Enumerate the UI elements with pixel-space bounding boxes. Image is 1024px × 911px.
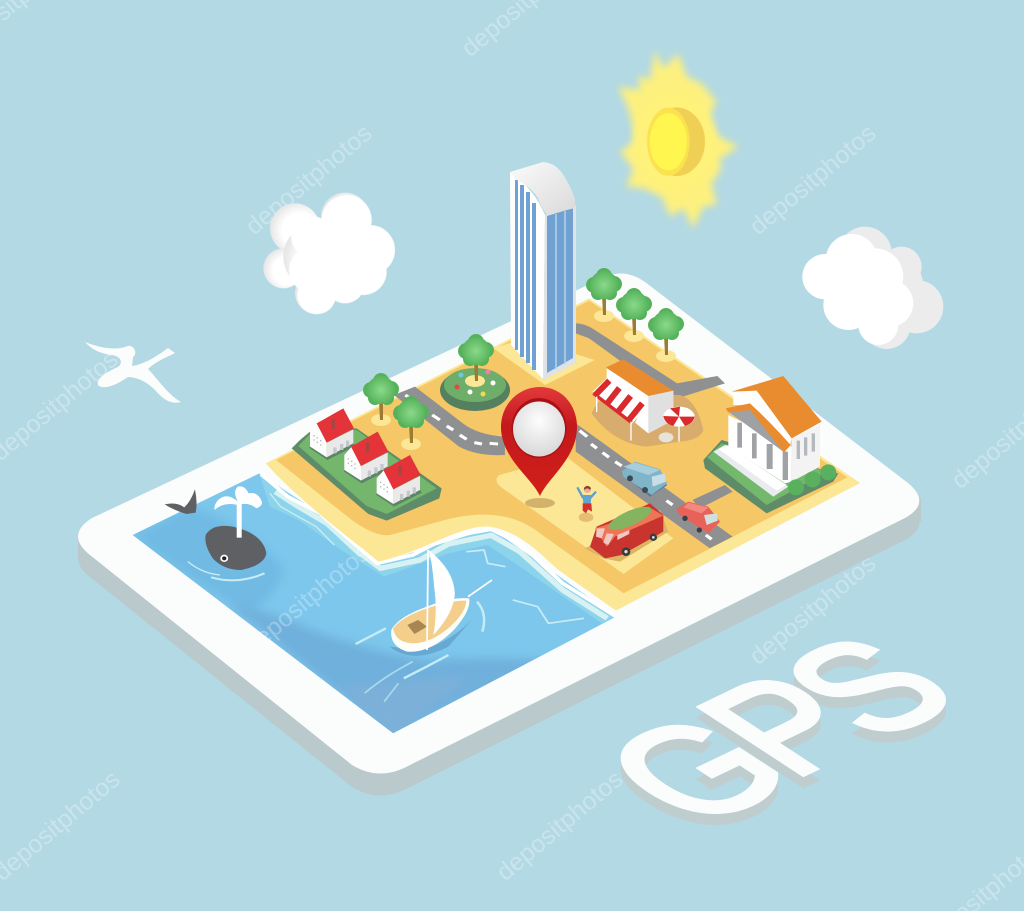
steps bbox=[713, 445, 788, 497]
foam bbox=[188, 474, 616, 623]
panel: water bbox=[132, 473, 616, 737]
cafe bbox=[592, 359, 703, 447]
ground bbox=[276, 301, 847, 593]
awning bbox=[593, 378, 647, 424]
tree bbox=[363, 373, 399, 426]
cloud: left bbox=[263, 193, 395, 314]
stock watermarks: depositphotos bbox=[744, 549, 881, 671]
sail bbox=[429, 550, 455, 635]
GPS lettering: G bbox=[560, 689, 833, 850]
pedestrian plaza bbox=[496, 457, 673, 574]
road: upper left bbox=[394, 387, 505, 455]
beach sand bbox=[266, 298, 860, 611]
GPS extruded depth bbox=[560, 621, 997, 861]
watermark over map: depositphotos bbox=[238, 539, 375, 661]
GPS lettering: P bbox=[656, 648, 914, 801]
tree bbox=[586, 268, 622, 322]
stock watermarks: depositphotos bbox=[491, 765, 628, 887]
tablet side bbox=[78, 295, 921, 796]
flower bed bbox=[440, 334, 510, 411]
cloud: right bbox=[802, 227, 943, 349]
walls bbox=[792, 425, 820, 482]
main roof bbox=[732, 376, 822, 438]
road: back bbox=[576, 323, 725, 398]
whale tail bbox=[165, 489, 197, 514]
cafe roof bbox=[606, 359, 673, 396]
road dashes bbox=[405, 395, 712, 539]
icon: seagull bbox=[85, 342, 181, 403]
GPS lettering bbox=[560, 610, 997, 850]
umbrella bbox=[663, 407, 695, 442]
tower roof bbox=[510, 162, 575, 215]
GPS lettering: S bbox=[739, 610, 997, 763]
tower bbox=[510, 162, 576, 380]
shallow water bbox=[259, 473, 616, 623]
deep water bands bbox=[132, 510, 281, 606]
green island bbox=[703, 440, 838, 513]
house bbox=[376, 455, 422, 507]
stock watermarks: depositphotos bbox=[240, 119, 377, 241]
stock watermarks: depositphotos bbox=[744, 119, 881, 241]
red car bbox=[676, 502, 720, 533]
GPS extruded depth: P bbox=[656, 659, 914, 812]
hull bbox=[391, 598, 469, 652]
house bbox=[344, 432, 390, 483]
spout bbox=[214, 486, 262, 538]
tablet top face bbox=[78, 273, 919, 774]
sailboat bbox=[356, 550, 492, 702]
road: side bbox=[692, 485, 733, 508]
tower windows bbox=[515, 180, 536, 370]
cafe terrace shadow bbox=[592, 393, 703, 447]
tree bbox=[393, 396, 429, 450]
panel: land bbox=[266, 298, 860, 611]
tablet bbox=[78, 273, 921, 796]
road: main avenue bbox=[576, 423, 733, 548]
whale body bbox=[205, 526, 266, 570]
GPS extruded depth: S bbox=[739, 621, 997, 774]
blue van bbox=[621, 462, 667, 497]
wake bbox=[356, 602, 484, 678]
red bus with surfboard bbox=[585, 502, 668, 562]
whale bbox=[165, 486, 266, 570]
map pin bbox=[501, 387, 577, 508]
tower plaza bbox=[493, 338, 595, 385]
icon: sun bbox=[618, 50, 738, 228]
GPS label bbox=[560, 610, 997, 861]
tree bbox=[648, 308, 684, 362]
tree bbox=[616, 288, 652, 342]
bank building bbox=[703, 376, 838, 513]
pediment bbox=[728, 408, 783, 452]
person waving bbox=[577, 486, 596, 522]
island: houses bbox=[292, 408, 442, 521]
bushes bbox=[788, 464, 836, 495]
house bbox=[309, 408, 355, 460]
GPS extruded depth: G bbox=[560, 700, 833, 861]
